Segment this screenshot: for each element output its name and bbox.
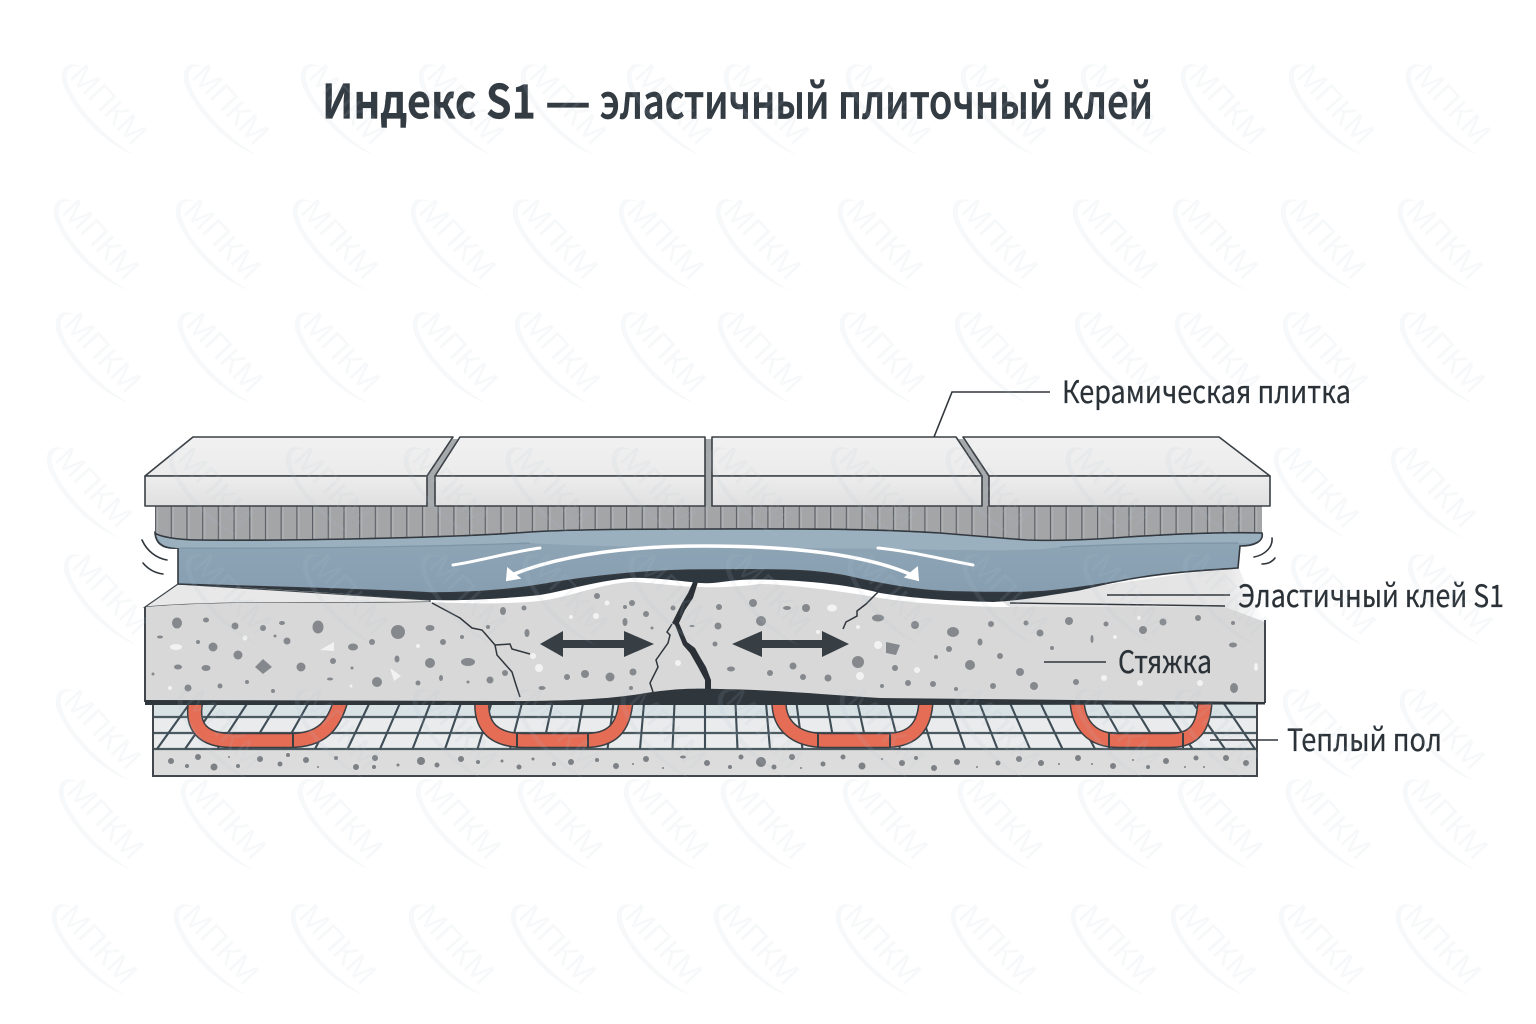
watermark pattern: МПКМ — [296, 682, 387, 776]
tile 1 — [145, 437, 453, 506]
watermark pattern: МПКМ — [1167, 440, 1258, 534]
watermark pattern: МПКМ — [952, 897, 1043, 991]
watermark pattern: МПКМ — [1392, 440, 1483, 534]
watermark pattern: МПКМ — [1079, 772, 1170, 866]
watermark pattern: МПКМ — [1284, 305, 1375, 399]
tile 3 — [712, 437, 982, 506]
label: elastic adhesive — [1010, 571, 1504, 616]
watermark pattern: МПКМ — [512, 897, 603, 991]
watermark pattern: МПКМ — [1174, 192, 1265, 286]
watermark pattern: МПКМ — [618, 897, 709, 991]
watermark pattern: МПКМ — [1284, 682, 1375, 776]
adhesive dark lower edge — [178, 555, 1238, 602]
mesh tinted top row — [154, 704, 1256, 717]
screed top face left — [145, 584, 430, 607]
watermark pattern: МПКМ — [414, 682, 505, 776]
thin crack branches — [432, 590, 880, 697]
watermark pattern: МПКМ — [1292, 547, 1383, 641]
adhesive crease line — [180, 543, 1238, 548]
screed aggregate, grey stones — [152, 593, 1238, 693]
tile 4 — [963, 437, 1270, 506]
watermark pattern: МПКМ — [1084, 547, 1175, 641]
watermark pattern: МПКМ — [65, 547, 156, 641]
watermark pattern: МПКМ — [185, 57, 276, 151]
watermark pattern: МПКМ — [1076, 682, 1167, 776]
watermark pattern: МПКМ — [832, 440, 923, 534]
watermark pattern: МПКМ — [422, 547, 513, 641]
watermark pattern: МПКМ — [1287, 772, 1378, 866]
watermark pattern: МПКМ — [55, 192, 146, 286]
watermark pattern: МПКМ — [524, 547, 615, 641]
watermark pattern: МПКМ — [1074, 192, 1165, 286]
watermark pattern: МПКМ — [849, 547, 940, 641]
watermark pattern: МПКМ — [514, 192, 605, 286]
reinforcement grid — [154, 703, 1256, 749]
watermark pattern: МПКМ — [956, 682, 1047, 776]
watermark pattern: МПКМ — [63, 57, 154, 151]
watermark pattern: МПКМ — [839, 192, 930, 286]
heating pipe loop 2 — [482, 700, 626, 748]
watermark pattern: МПКМ — [414, 305, 505, 399]
watermark pattern: МПКМ — [1399, 192, 1490, 286]
layer: elastic adhesive S1 — [155, 529, 1262, 602]
watermark pattern: МПКМ — [516, 305, 607, 399]
layer: cracked screed — [145, 566, 1265, 705]
adhesive upper lighter band — [157, 530, 1261, 550]
watermark pattern: МПКМ — [1275, 440, 1366, 534]
title: эластичный плиточный клей — [600, 64, 1153, 132]
watermark pattern: МПКМ — [299, 772, 390, 866]
watermark pattern: МПКМ — [60, 772, 151, 866]
main crack — [672, 582, 711, 690]
watermark pattern: МПКМ — [620, 192, 711, 286]
expansion arrow right — [732, 631, 849, 657]
watermark pattern: МПКМ — [516, 682, 607, 776]
watermark pattern: МПКМ — [519, 772, 610, 866]
base concrete speckles — [168, 753, 1249, 771]
watermark pattern: МПКМ — [294, 192, 385, 286]
heating pipe loop 1 — [195, 700, 341, 748]
base concrete of the heated floor — [153, 703, 1257, 776]
title — [322, 64, 1153, 132]
watermark pattern: МПКМ — [947, 440, 1038, 534]
vibration marks right — [1254, 538, 1275, 564]
watermark pattern: МПКМ — [1397, 897, 1488, 991]
watermark pattern: МПКМ — [719, 305, 810, 399]
watermark pattern: МПКМ — [1407, 57, 1498, 151]
layer: ceramic tiles — [145, 437, 1270, 506]
watermark pattern: МПКМ — [1176, 682, 1267, 776]
watermark pattern: МПКМ — [302, 57, 393, 151]
label: ceramic tile: Керамическая плитка — [1062, 367, 1351, 412]
screed bottom dark line — [145, 689, 1265, 705]
watermark pattern: МПКМ — [296, 305, 387, 399]
watermark pattern: МПКМ — [1401, 682, 1492, 776]
watermark pattern: МПКМ — [959, 772, 1050, 866]
watermark pattern: МПКМ — [964, 547, 1055, 641]
watermark pattern: МПКМ — [841, 682, 932, 776]
heating pipe loop 3 — [779, 700, 926, 748]
watermark pattern: МПКМ — [175, 897, 266, 991]
watermark pattern: МПКМ — [722, 772, 813, 866]
watermark pattern: МПКМ — [187, 547, 278, 641]
vibration marks left — [142, 540, 167, 574]
watermark pattern: МПКМ — [613, 440, 704, 534]
watermark pattern: МПКМ — [622, 682, 713, 776]
watermark pattern: МПКМ — [1067, 440, 1158, 534]
watermark pattern: МПКМ — [304, 547, 395, 641]
watermark pattern: МПКМ — [1176, 305, 1267, 399]
watermark pattern: МПКМ — [292, 897, 383, 991]
watermark pattern: МПКМ — [962, 57, 1053, 151]
watermark pattern: МПКМ — [715, 897, 806, 991]
watermark pattern: МПКМ — [628, 57, 719, 151]
watermark pattern: МПКМ — [1072, 897, 1163, 991]
label: screed: Стяжка — [1118, 637, 1212, 682]
grout joints — [427, 439, 989, 506]
layer: grooved mortar under tiles — [155, 506, 1262, 540]
label: underfloor heating: Теплый пол — [1287, 715, 1442, 760]
watermark pattern: МПКМ — [1082, 57, 1173, 151]
tile 2 — [435, 437, 705, 506]
watermark pattern: МПКМ — [622, 305, 713, 399]
watermark pattern: МПКМ — [412, 192, 503, 286]
adhesive body — [155, 529, 1262, 593]
watermark pattern: МПКМ — [405, 440, 496, 534]
watermark pattern: МПКМ — [1404, 772, 1495, 866]
layer: underfloor heating — [153, 700, 1257, 776]
watermark pattern: МПКМ — [717, 192, 808, 286]
stretch arrow white arc — [453, 546, 973, 580]
watermark pattern: МПКМ — [841, 305, 932, 399]
watermark pattern: МПКМ — [179, 305, 270, 399]
heating pipe loop 4 — [1077, 700, 1205, 748]
label: ceramic tile — [934, 367, 1351, 437]
watermark pattern: МПКМ — [710, 440, 801, 534]
watermark pattern: МПКМ — [522, 57, 613, 151]
watermark pattern: МПКМ — [57, 682, 148, 776]
watermark pattern: МПКМ — [1172, 897, 1263, 991]
watermark pattern: МПКМ — [956, 305, 1047, 399]
watermark pattern: МПКМ — [837, 897, 928, 991]
watermark pattern: МПКМ — [1184, 547, 1275, 641]
watermark pattern: МПКМ — [719, 682, 810, 776]
screed top face right — [1000, 566, 1265, 622]
watermark pattern: МПКМ — [954, 192, 1045, 286]
title: — — [545, 64, 591, 132]
watermark pattern: МПКМ — [625, 772, 716, 866]
watermark pattern: МПКМ — [727, 547, 818, 641]
watermark pattern: МПКМ — [1401, 305, 1492, 399]
watermark pattern: МПКМ — [844, 772, 935, 866]
watermark pattern: МПКМ — [1290, 57, 1381, 151]
watermark pattern: МПКМ — [725, 57, 816, 151]
watermark pattern: МПКМ — [170, 440, 261, 534]
watermark pattern: МПКМ — [48, 440, 139, 534]
watermark pattern: МПКМ — [1076, 305, 1167, 399]
watermark pattern: МПКМ — [287, 440, 378, 534]
watermark pattern: МПКМ — [1182, 57, 1273, 151]
watermark pattern: МПКМ — [1409, 547, 1500, 641]
watermark pattern: МПКМ — [57, 305, 148, 399]
screed body — [145, 582, 1265, 703]
watermark pattern: МПКМ — [507, 440, 598, 534]
watermark pattern: МПКМ — [53, 897, 144, 991]
watermark pattern: МПКМ — [630, 547, 721, 641]
watermark pattern: МПКМ — [410, 897, 501, 991]
screed outline — [145, 607, 1265, 703]
watermark pattern: МПКМ — [182, 772, 273, 866]
expansion arrow left — [540, 631, 654, 657]
watermark pattern: МПКМ — [1179, 772, 1270, 866]
watermark pattern: МПКМ — [1282, 192, 1373, 286]
mesh area — [154, 704, 1256, 749]
watermark pattern: МПКМ — [177, 192, 268, 286]
watermark pattern: МПКМ — [420, 57, 511, 151]
watermark pattern: МПКМ — [417, 772, 508, 866]
watermark pattern: МПКМ — [1280, 897, 1371, 991]
screed aggregate, white stones — [168, 600, 1258, 690]
watermark pattern: МПКМ — [847, 57, 938, 151]
watermark pattern: МПКМ — [179, 682, 270, 776]
title: Индекс S1 — [322, 64, 536, 132]
